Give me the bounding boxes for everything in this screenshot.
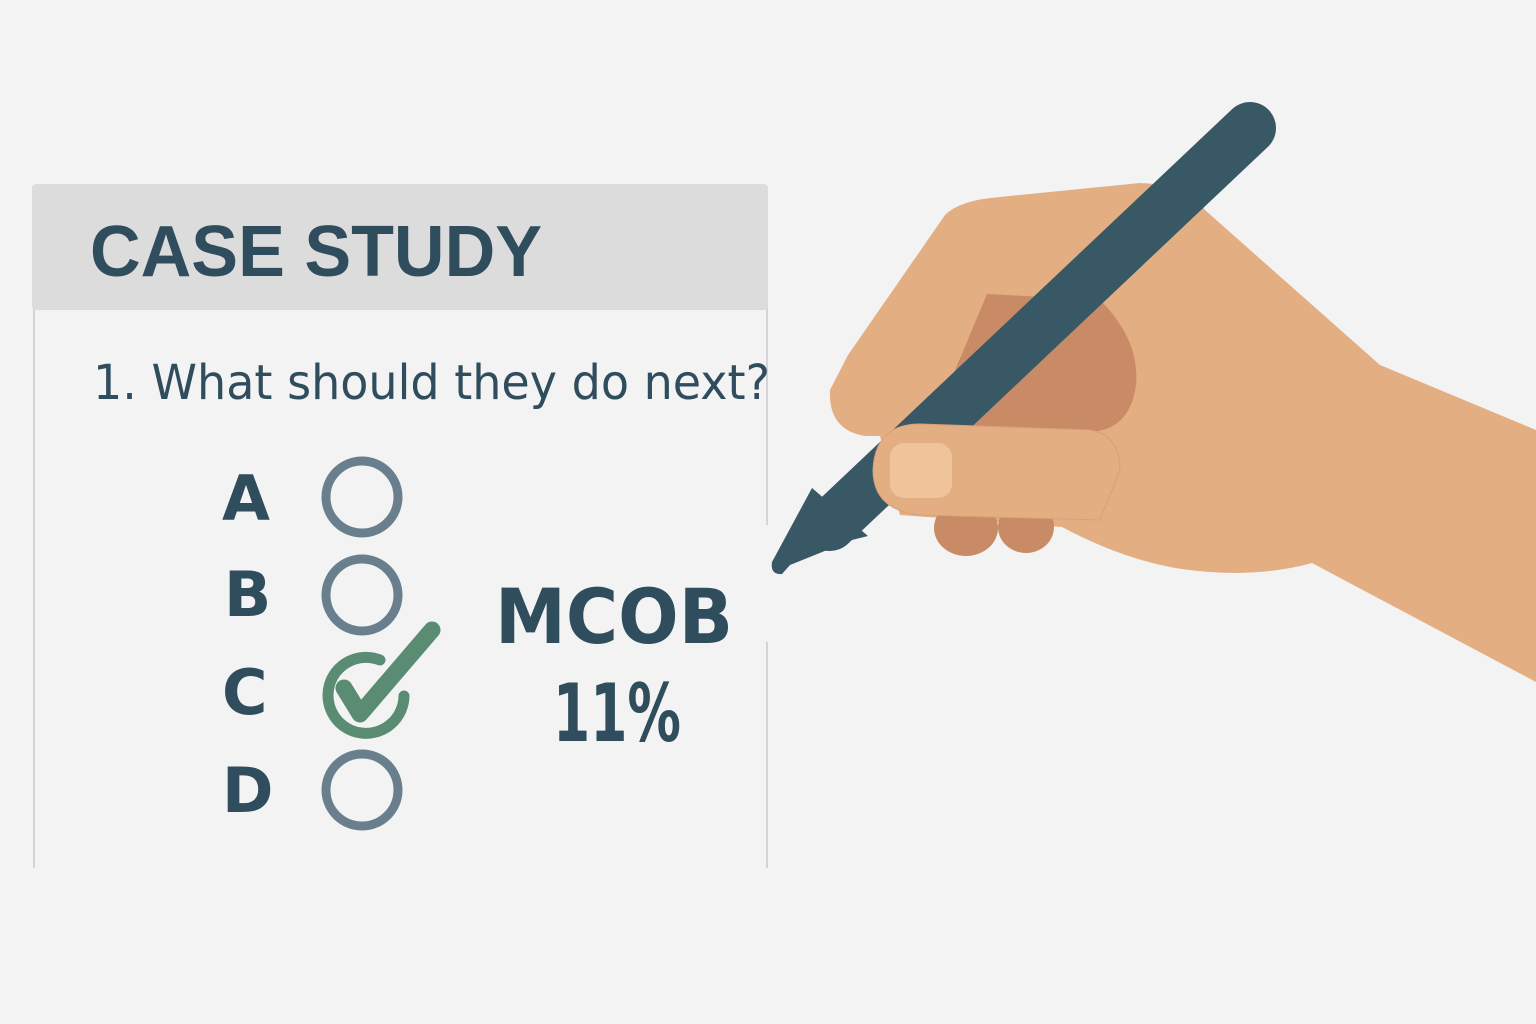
handwritten note: 11% — [553, 667, 681, 760]
thumbnail — [890, 443, 952, 498]
palm shadow — [930, 294, 1136, 432]
pen — [772, 128, 1250, 574]
title: CASE STUDY — [90, 212, 542, 292]
option D — [222, 754, 398, 827]
option A — [222, 461, 398, 535]
panel: case study card — [32, 184, 770, 874]
option C checked — [222, 630, 432, 733]
thumb — [873, 424, 1120, 520]
handwritten note — [495, 572, 733, 760]
option B — [224, 558, 398, 631]
heading bar — [32, 184, 768, 310]
option C checked: C — [222, 656, 268, 729]
handwritten note: MCOB — [495, 572, 733, 661]
question text: 1. What should they do next? — [93, 355, 770, 411]
knuckles — [934, 500, 1054, 556]
options list — [222, 461, 432, 827]
hand body — [830, 183, 1536, 682]
option D: D — [222, 754, 273, 827]
option B: B — [224, 558, 271, 631]
option A: A — [222, 462, 270, 535]
illustration: hand holding pen — [772, 128, 1536, 682]
